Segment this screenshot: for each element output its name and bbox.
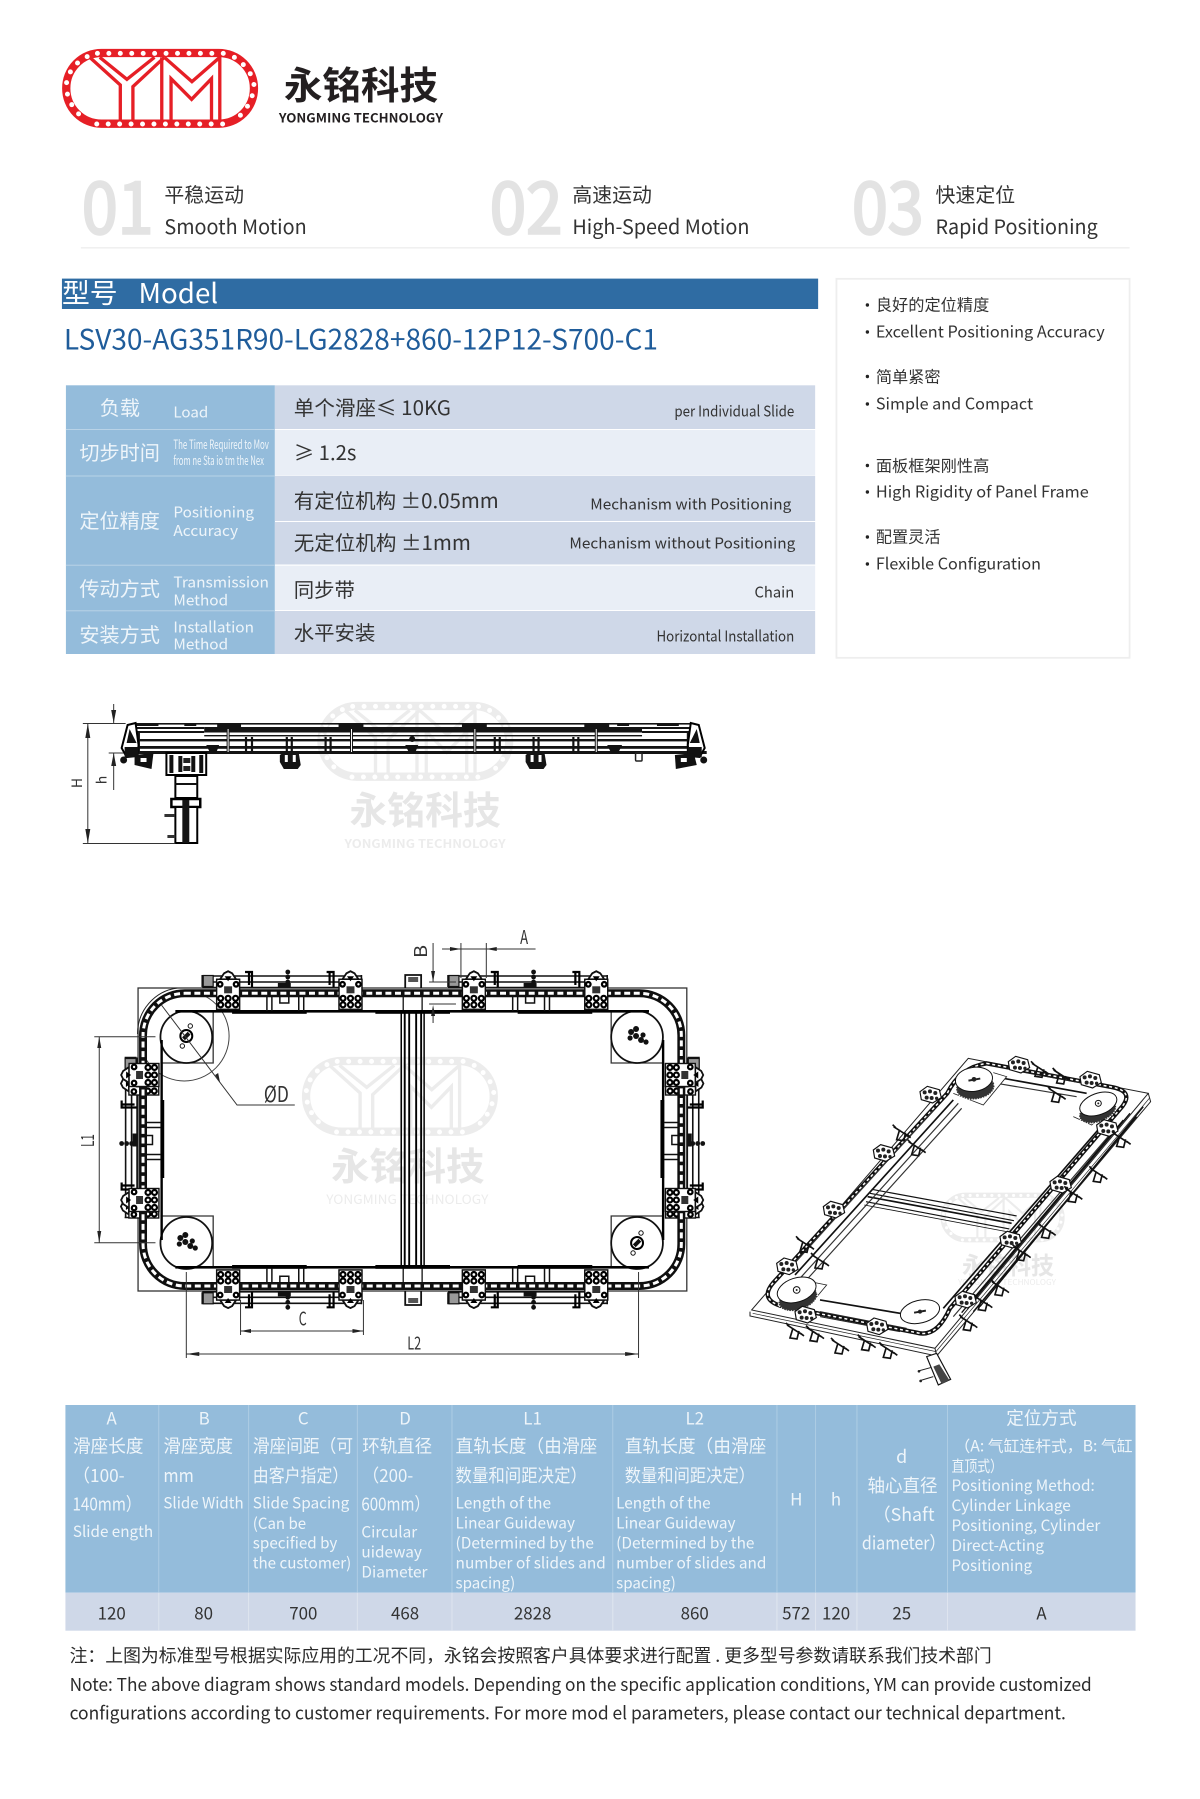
feature 03: 快速定位 xyxy=(936,179,1015,208)
row: installation xyxy=(79,616,794,655)
isometric view drawing xyxy=(750,1056,1151,1385)
data row: 2828 xyxy=(514,1599,551,1624)
footnote: configurations according to customer requirements. For more mod el parameters, please contact our technical department. xyxy=(70,1699,1066,1726)
column L2 header: 数量和间距决定） xyxy=(625,1462,755,1488)
column D header xyxy=(361,1404,432,1583)
list item: rigidity: 面板框架刚性高 xyxy=(876,452,989,476)
dimension h xyxy=(92,704,124,790)
column L2 header xyxy=(616,1404,766,1594)
column L2 header: Linear Guideway xyxy=(616,1511,736,1534)
panel: feature list xyxy=(836,279,1130,658)
column L1 header: spacing) xyxy=(456,1571,515,1594)
list item: flexible xyxy=(876,524,1041,575)
column C header: (Can be xyxy=(253,1512,306,1534)
row: installation: Horizontal Installation xyxy=(656,625,794,647)
column A header: （100- xyxy=(73,1462,125,1488)
data row xyxy=(98,1599,1047,1624)
feature 02: High-Speed Motion xyxy=(572,211,749,240)
footnote: Note: The above diagram shows standard models. Depending on the specific application conditions, YM can provide customized xyxy=(70,1671,1092,1697)
column L1 header: L1 xyxy=(523,1404,542,1430)
carriage tabs xyxy=(280,753,642,769)
data row: 860 xyxy=(681,1599,709,1624)
dimension L2 xyxy=(186,1272,639,1358)
column C header: Slide Spacing xyxy=(253,1491,350,1514)
watermark: top view xyxy=(306,1061,494,1208)
cross beam xyxy=(864,1189,1017,1232)
column L1 header: Linear Guideway xyxy=(456,1511,575,1534)
row: transmission: Chain xyxy=(754,581,794,603)
column d header xyxy=(862,1443,945,1556)
row: load: per Individual Slide xyxy=(674,400,794,422)
list item: compact: Simple and Compact xyxy=(876,391,1033,415)
feature strip: three motion features xyxy=(81,153,1130,255)
column H and h headers xyxy=(790,1485,841,1511)
dimension h: h xyxy=(92,776,112,784)
footnote xyxy=(70,1642,1092,1726)
column B header: Slide Width xyxy=(163,1491,244,1514)
company name: YONGMING TECHNOLOGY xyxy=(278,107,444,127)
model heading bar: 型号 xyxy=(62,272,118,311)
row: transmission xyxy=(79,571,794,611)
column positioning method header xyxy=(951,1404,1133,1576)
column L1 header: (Determined by the xyxy=(456,1531,594,1554)
row: positioning accuracy: Mechanism without Positioning xyxy=(569,532,796,554)
column H and h headers: H xyxy=(790,1485,802,1511)
model number: LSV30-AG351R90-LG2828+860-12P12-S700-C1 xyxy=(64,318,658,359)
logo: YM red chain mark xyxy=(66,53,254,124)
feature 01: Smooth Motion xyxy=(164,211,307,240)
column D header: 600mm） xyxy=(361,1490,430,1517)
column A header: Slide ength xyxy=(73,1520,153,1542)
column A header: A xyxy=(107,1404,118,1430)
watermark: isometric view: 永铭科技 xyxy=(962,1246,1054,1281)
parameter table xyxy=(65,1404,1136,1631)
column L1 header: Length of the xyxy=(456,1491,551,1514)
column L1 header xyxy=(456,1404,606,1594)
company name: 永铭科技 xyxy=(284,55,438,110)
feature 01: 01 xyxy=(82,153,153,255)
data row: 120 xyxy=(822,1599,850,1624)
chain track loop xyxy=(138,988,681,1286)
column positioning method header: Positioning Method: xyxy=(951,1474,1095,1496)
watermark: top view: YONGMING TECHNOLOGY xyxy=(325,1189,489,1208)
rail body xyxy=(135,723,707,754)
watermark: side view: YONGMING TECHNOLOGY xyxy=(343,835,507,852)
chain loop and guide rails xyxy=(768,1063,1143,1334)
row: step time: ≥ 1.2s xyxy=(294,437,356,466)
list item: compact xyxy=(876,363,1033,415)
row: installation: 安装方式 xyxy=(79,619,160,648)
dimension H: H xyxy=(67,778,87,788)
column C header: C xyxy=(298,1404,309,1430)
column D header: Circular xyxy=(361,1520,418,1543)
column L2 header: 直轨长度（由滑座 xyxy=(625,1432,766,1459)
column positioning method header: 直顶式） xyxy=(951,1454,1003,1476)
dimension H xyxy=(67,724,175,844)
top view drawing xyxy=(74,923,705,1358)
column B header: mm xyxy=(163,1462,194,1488)
row: step time: from ne Sta io tm the Nex xyxy=(173,451,264,469)
page lower content: parameter table and footnote xyxy=(65,1404,1136,1726)
column C header: specified by xyxy=(253,1531,337,1554)
column D header: 环轨直径 xyxy=(362,1432,432,1459)
side view drawing xyxy=(67,704,707,844)
feature 03: 03 xyxy=(852,153,924,255)
dimension diameter D: ØD xyxy=(264,1078,289,1109)
feature 01 xyxy=(82,153,307,255)
specification table xyxy=(66,385,815,655)
column A header: 滑座长度 xyxy=(73,1432,144,1459)
row: positioning accuracy: Mechanism with Positioning xyxy=(590,493,792,515)
column A header: 140mm） xyxy=(72,1490,141,1517)
watermark: side view: 永铭科技 xyxy=(349,780,501,835)
watermark: top view: 永铭科技 xyxy=(331,1136,485,1191)
data row: 700 xyxy=(289,1599,317,1624)
corner sprocket plates xyxy=(774,1065,1120,1327)
column d header: 轴心直径 xyxy=(867,1472,938,1498)
row: transmission: Method xyxy=(173,589,228,611)
corner plates and sprockets xyxy=(140,991,663,1269)
list item: rigidity: High Rigidity of Panel Frame xyxy=(876,479,1089,503)
column D header: D xyxy=(399,1404,411,1430)
feature 02 xyxy=(490,153,749,255)
row: transmission: Transmission xyxy=(173,571,269,593)
dimension C: C xyxy=(299,1304,307,1332)
slide carriages xyxy=(777,1056,1118,1335)
row: positioning accuracy: 有定位机构 ±0.05mm xyxy=(294,485,499,514)
left end cap xyxy=(120,723,153,769)
drive unit xyxy=(918,1353,951,1385)
footnote: 注：上图为标准型号根据实际应用的工况不同，永铭会按照客户具体要求进行配置 . 更多型号参数请联系我们技术部门 xyxy=(70,1642,992,1668)
dimension diameter D xyxy=(161,1005,295,1109)
row: positioning accuracy: 无定位机构 ±1mm xyxy=(294,527,471,556)
column d header: diameter） xyxy=(862,1529,945,1556)
row: load: 单个滑座≤ 10KG xyxy=(294,392,451,421)
list item: positioning accuracy xyxy=(876,292,1105,343)
dimension L2: L2 xyxy=(407,1329,421,1355)
row: transmission: 传动方式 xyxy=(79,573,160,602)
row: installation: 水平安装 xyxy=(294,617,375,646)
slide modules xyxy=(119,970,705,1310)
column d header: （Shaft xyxy=(873,1501,935,1527)
inner guide lines xyxy=(160,1010,664,1269)
list item: compact: 简单紧密 xyxy=(876,363,941,387)
data row: 120 xyxy=(98,1599,126,1624)
column positioning method header: Positioning, Cylinder xyxy=(951,1514,1101,1536)
column positioning method header: Direct-Acting xyxy=(951,1534,1044,1556)
slide brackets xyxy=(786,1061,1131,1358)
feature 01: 平稳运动 xyxy=(164,179,244,208)
column d header: d xyxy=(896,1443,907,1469)
row: transmission: 同步带 xyxy=(294,574,355,603)
list item: positioning accuracy: Excellent Positioning Accuracy xyxy=(876,319,1105,343)
row: positioning accuracy xyxy=(79,485,796,556)
rail posts xyxy=(228,729,596,752)
list item: flexible: 配置灵活 xyxy=(876,524,941,548)
column L1 header: 数量和间距决定） xyxy=(456,1462,587,1488)
hubs xyxy=(177,1024,649,1255)
row: installation: Installation xyxy=(173,616,254,638)
column D header: uideway xyxy=(361,1540,422,1563)
drive unit xyxy=(164,753,206,843)
row: step time: The Time Required to Mov xyxy=(173,435,269,453)
data row: 468 xyxy=(391,1599,419,1624)
column L2 header: number of slides and xyxy=(616,1551,766,1574)
feature 02: 高速运动 xyxy=(572,179,652,208)
base frame outline xyxy=(138,988,687,1291)
dimension B: B xyxy=(407,945,433,958)
data row: A xyxy=(1036,1599,1047,1624)
column B header: B xyxy=(199,1404,210,1430)
feature 03: Rapid Positioning xyxy=(936,211,1098,240)
column B header xyxy=(163,1404,244,1514)
right end cap xyxy=(675,723,707,769)
column C header: 由客户指定） xyxy=(253,1462,348,1488)
row: positioning accuracy: Accuracy xyxy=(173,520,238,541)
dimension C xyxy=(241,1300,363,1335)
list item: rigidity xyxy=(876,452,1089,503)
column C header: the customer) xyxy=(253,1551,351,1574)
column H and h headers: h xyxy=(831,1485,841,1511)
dimension L1 xyxy=(74,1037,155,1243)
list item: positioning accuracy: 良好的定位精度 xyxy=(876,292,989,316)
column C header: 滑座间距（可 xyxy=(253,1432,353,1459)
watermark: isometric view: YONGMING TECHNOLOGY xyxy=(957,1277,1057,1288)
column B header: 滑座宽度 xyxy=(163,1432,233,1459)
row: load xyxy=(100,392,794,423)
row: load: Load xyxy=(173,401,208,423)
row: positioning accuracy: 定位精度 xyxy=(79,505,160,534)
column L2 header: spacing) xyxy=(616,1571,676,1594)
column positioning method header: 定位方式 xyxy=(1006,1404,1077,1431)
list item: flexible: Flexible Configuration xyxy=(876,551,1041,575)
base frame xyxy=(750,1058,1151,1356)
row: positioning accuracy: Positioning xyxy=(173,501,255,523)
carriages over chain xyxy=(121,971,703,1308)
dimension A: A xyxy=(520,923,528,950)
row: step time xyxy=(79,435,356,469)
column L2 header: (Determined by the xyxy=(616,1531,754,1554)
column L2 header: L2 xyxy=(685,1404,704,1430)
page upper content: header, specs, side and top views xyxy=(62,53,1130,1358)
data row: 572 xyxy=(782,1599,810,1624)
column D header: Diameter xyxy=(361,1560,428,1583)
column C header xyxy=(253,1404,353,1574)
model heading bar: Model xyxy=(139,272,218,311)
dimension B xyxy=(407,943,456,1023)
watermark: isometric view xyxy=(943,1195,1062,1288)
column positioning method header: Positioning xyxy=(951,1554,1032,1576)
row: step time: 切步时间 xyxy=(79,437,160,466)
watermark: side view xyxy=(321,706,509,852)
dimension A xyxy=(442,923,536,978)
data row: 25 xyxy=(892,1599,911,1624)
feature 03 xyxy=(852,153,1098,255)
column positioning method header: （A: 气缸连杆式，B: 气缸 xyxy=(954,1434,1133,1457)
column D header: （200- xyxy=(362,1462,413,1488)
column L2 header: Length of the xyxy=(616,1491,711,1514)
feature 02: 02 xyxy=(490,153,562,255)
data row: 80 xyxy=(194,1599,213,1624)
center cross beam xyxy=(401,975,424,1305)
column L1 header: 直轨长度（由滑座 xyxy=(456,1432,597,1459)
column A header xyxy=(72,1404,153,1542)
column L1 header: number of slides and xyxy=(456,1551,606,1574)
dimension L1: L1 xyxy=(74,1134,100,1147)
column positioning method header: Cylinder Linkage xyxy=(951,1494,1071,1516)
row: load: 负载 xyxy=(100,392,140,421)
model heading bar xyxy=(62,272,818,311)
row: installation: Method xyxy=(173,633,228,655)
